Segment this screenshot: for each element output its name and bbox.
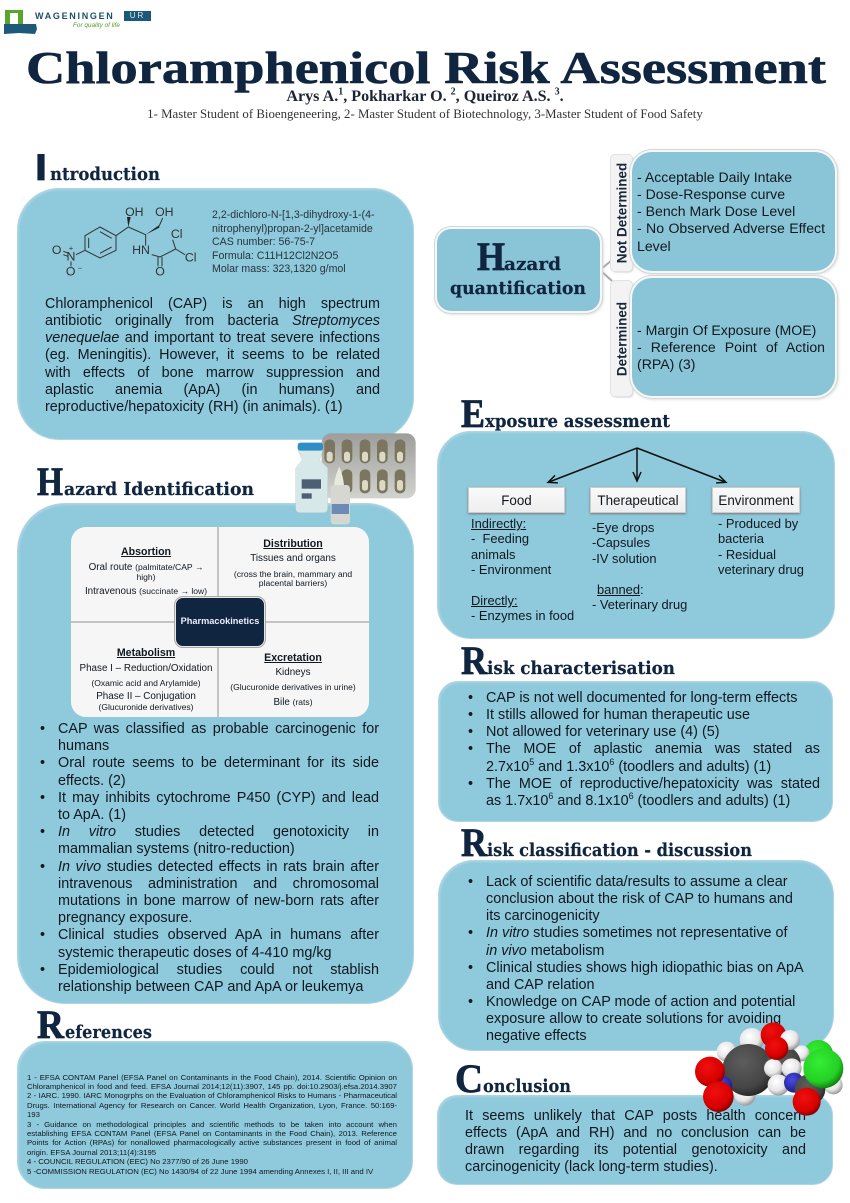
hazard identification bullets: Clinical studies observed ApA in humans after xyxy=(58,927,379,943)
environment text: - Residual xyxy=(718,547,776,562)
therapeutical text: -Capsules xyxy=(592,535,650,550)
heading: risk classification xyxy=(461,820,752,865)
heading: risk classification: R xyxy=(461,820,488,865)
environment text: bacteria xyxy=(718,531,764,546)
discussion bullets: Knowledge on CAP mode of action and potential xyxy=(486,994,795,1010)
discussion bullets: Lack of scientific data/results to assume a clear xyxy=(486,874,788,890)
discussion bullets: negative effects xyxy=(486,1028,587,1044)
reference list: 4 - COUNCIL REGULATION (EEC) No 2377/90 of 26 June 1990 xyxy=(27,1157,248,1166)
food text: animals xyxy=(471,547,515,562)
food text: - Feeding xyxy=(471,531,529,546)
introduction text: antibiotic originally from bacteria Streptomyces xyxy=(45,313,380,329)
heading: risk characterisation xyxy=(461,638,675,683)
logo mark xyxy=(4,10,37,34)
cell: absorption: high) xyxy=(136,572,156,582)
discussion bullets: in vivo metabolism xyxy=(486,943,604,959)
therapeutical text: -Eye drops xyxy=(592,520,654,535)
panel: hazard quantification xyxy=(437,229,600,311)
hazard identification bullets: effects. (2) xyxy=(58,773,126,789)
conclusion text: effects (ApA and RH) and no conclusion can be xyxy=(465,1125,806,1141)
hazard identification bullets xyxy=(40,721,379,995)
reference list: 1 - EFSA CONTAM Panel (EFSA Panel on Contaminants in the Food Chain), 2014. Scientific Opinion on xyxy=(27,1072,397,1082)
cell: absorption xyxy=(85,546,207,597)
box: environment: Environment xyxy=(718,493,794,508)
reference list: 5 -COMMISSION REGULATION (EC) No 1430/94 of 22 June 1994 amending Annexes I, II, III and IV xyxy=(27,1167,373,1176)
reference list: 3 - Guidance on methodological principles and scientific methods to be taken into account when xyxy=(27,1120,397,1129)
heading: introduction: I xyxy=(35,147,47,188)
not determined list: - No Observed Adverse Effect xyxy=(637,220,825,236)
cell: metabolism: (Oxamic acid and Arylamide) xyxy=(91,678,201,688)
compound data: CAS number: 56-75-7 xyxy=(212,236,315,248)
discussion bullets: its carcinogenicity xyxy=(486,908,600,924)
chemical structure: O xyxy=(66,265,75,279)
exposure arrows xyxy=(546,447,728,484)
heading: hazard quantification: quantification xyxy=(450,278,586,299)
hazard identification bullets: systemic therapeutic doses of 4-410 mg/kg xyxy=(58,945,332,961)
introduction text: (eg. Meningitis). However, it seems to be related xyxy=(45,347,380,363)
image: medicine vial, dropper and capsules xyxy=(295,433,416,524)
cell: excretion: Kidneys xyxy=(275,667,311,678)
introduction text xyxy=(45,296,380,415)
heading: exposure assessment: E xyxy=(461,391,485,436)
connector: hazard quantification branches xyxy=(603,260,613,282)
horizontal divider xyxy=(71,621,369,623)
hazard identification bullets: intravenous administration and chromosomal xyxy=(58,876,379,892)
not determined list xyxy=(637,169,825,254)
food text: - Enzymes in food xyxy=(471,608,574,623)
introduction text: venequelae and important to treat severe infections xyxy=(45,330,380,346)
reference list: establishing EFSA CONTAM Panel (EFSA Panel on Contaminants in the Food Chain), 2013. Reference xyxy=(27,1129,397,1138)
hazard identification bullets: It may inhibits cytochrome P450 (CYP) and lead xyxy=(58,790,379,806)
hazard identification bullets: to ApA. (1) xyxy=(58,807,126,823)
hazard identification bullets: mutations in bone marrow of new-born rats after xyxy=(58,893,379,909)
environment text xyxy=(718,516,804,577)
heading: references: R xyxy=(37,1002,65,1047)
chemical structure: O xyxy=(155,265,165,279)
reference list: Chloramphenicol in food and feed. EFSA Journal 2014;12(11):3907, 145 pp. doi:10.2903/j.efsa.2014.3907 xyxy=(27,1082,397,1091)
food text: Directly: xyxy=(471,593,518,608)
image: 3D space-filling molecule xyxy=(695,1022,844,1116)
discussion bullets: conclusion about the risk of CAP to humans and xyxy=(486,891,793,907)
not determined list: - Bench Mark Dose Level xyxy=(637,203,795,219)
cell: metabolism xyxy=(80,647,212,712)
panel: determined xyxy=(632,278,835,396)
cell: metabolism: (Glucuronide derivatives) xyxy=(98,702,194,712)
food text xyxy=(471,516,574,623)
discussion bullets xyxy=(468,874,804,1044)
logo: Wageningen UR xyxy=(4,10,151,34)
not determined list: - Dose-Response curve xyxy=(637,186,785,202)
tab: determined: Determined xyxy=(614,301,629,376)
compound data: Formula: C11H12Cl2N2O5 xyxy=(212,250,338,262)
introduction text: reproductive/hepatoxicity (RH) (in animals). (1) xyxy=(45,399,343,415)
hazard identification bullets: Epidemiological studies could not stablish xyxy=(58,962,379,978)
reference list xyxy=(27,1072,397,1176)
cell: distribution: (cross the brain, mammary and xyxy=(234,569,352,579)
pharmacokinetics centre box: Pharmacokinetics xyxy=(181,616,259,626)
chemical structure: N xyxy=(67,250,75,264)
heading: introduction xyxy=(35,147,160,188)
panel: not determined xyxy=(632,152,835,271)
cell: metabolism: Metabolism xyxy=(117,647,175,659)
panel: hazard identification xyxy=(17,503,414,1004)
determined list xyxy=(637,322,825,372)
heading: conclusion xyxy=(455,1056,571,1101)
hazard identification bullets: relationship between CAP and ApA or leukemya xyxy=(58,979,363,995)
box: environment xyxy=(712,487,800,513)
pharmacokinetics centre box xyxy=(175,597,265,647)
logo UR tag xyxy=(124,11,151,21)
heading: exposure assessment xyxy=(461,391,671,436)
therapeutical text xyxy=(592,520,687,612)
hazard identification bullets: CAP was classified as probable carcinogenic for xyxy=(58,721,379,737)
reference list: 193 xyxy=(27,1110,40,1119)
compound data: nitrophenyl)propan-2-yl]acetamide xyxy=(212,223,373,235)
heading: references xyxy=(37,1002,152,1047)
box: therapeutical: Therapeutical xyxy=(597,493,679,508)
heading: conclusion: C xyxy=(455,1056,483,1101)
cell: excretion: Bile (rats) xyxy=(273,697,313,708)
risk characterisation bullets: 2.7x105 and 1.3x106 (toodlers and adults) (1) xyxy=(486,757,771,775)
environment text: - Produced by xyxy=(718,516,798,531)
heading: hazard identification: azard Identification xyxy=(64,479,254,500)
heading: conclusion: onclusion xyxy=(483,1076,571,1097)
not determined list: Level xyxy=(637,238,671,254)
conclusion text: drawn regarding its potential genotoxicity and xyxy=(465,1142,806,1158)
panel: risk characterisation xyxy=(438,681,833,822)
compound data: Molar mass: 323,1320 g/mol xyxy=(212,263,346,275)
title: Chloramphenicol Risk Assessment xyxy=(26,43,826,93)
heading: hazard quantification xyxy=(450,234,586,299)
heading: hazard identification xyxy=(37,459,254,504)
heading: hazard quantification: H xyxy=(477,234,505,279)
hazard identification bullets: pregnancy exposure. xyxy=(58,910,192,926)
conclusion text: It seems unlikely that CAP posts health concern xyxy=(465,1108,806,1124)
risk characterisation bullets: CAP is not well documented for long-term effects xyxy=(486,690,797,706)
reference list: origin. EFSA Journal 2013;11(4):3195 xyxy=(27,1148,156,1157)
risk characterisation bullets: The MOE of reproductive/hepatoxicity was stated xyxy=(486,776,820,792)
determined list: - Margin Of Exposure (MOE) xyxy=(637,322,816,338)
cell: distribution xyxy=(234,538,352,588)
panel: exposure assessment xyxy=(437,431,835,639)
panel: conclusion xyxy=(437,1095,833,1185)
tab: not determined: Not Determined xyxy=(614,163,629,263)
discussion bullets: and CAP relation xyxy=(486,977,595,993)
chemical structure: OH xyxy=(155,205,174,219)
therapeutical text: - Veterinary drug xyxy=(592,597,687,612)
panel: risk classification discussion xyxy=(438,860,834,1051)
heading: introduction: ntroduction xyxy=(50,164,160,185)
therapeutical text: -IV solution xyxy=(592,551,656,566)
conclusion text xyxy=(465,1108,806,1175)
reference list: Drugs. International Agency for Research on Cancer. World Health Organization, Lyon, France. 50:169- xyxy=(27,1101,397,1110)
heading: risk characterisation: isk characterisation xyxy=(487,658,675,679)
risk characterisation bullets: The MOE of aplastic anemia was stated as xyxy=(486,741,820,757)
conclusion text: carcinogenicity (lack long-term studies). xyxy=(465,1159,718,1175)
vertical divider xyxy=(217,527,219,717)
cell: excretion xyxy=(230,652,356,708)
not determined list: - Acceptable Daily Intake xyxy=(637,169,792,185)
heading: risk characterisation: R xyxy=(461,638,488,683)
heading: exposure assessment: xposure assessment xyxy=(485,411,671,432)
chemical structure: O xyxy=(52,243,61,257)
heading: risk classification: isk classification - discussion xyxy=(487,840,752,861)
logo wordmark: WAGENINGEN xyxy=(35,11,115,21)
cell: absorption: Intravenous (succinate → low) xyxy=(85,586,207,597)
introduction text: aplastic anemia (ApA) (in humans) and xyxy=(45,382,380,398)
food text: - Environment xyxy=(471,562,551,577)
panel: introduction xyxy=(17,188,414,440)
environment text: veterinary drug xyxy=(718,562,804,577)
compound data: 2,2-dichloro-N-[1,3-dihydroxy-1-(4- xyxy=(212,209,374,221)
cell: excretion: Excretation xyxy=(264,652,322,664)
cell: distribution: Tissues and organs xyxy=(250,553,336,564)
chemical structure: HN xyxy=(132,243,150,257)
risk characterisation bullets: as 1.7x106 and 8.1x106 (toodlers and adults) (1) xyxy=(486,791,790,809)
cell: distribution: placental barriers) xyxy=(259,578,327,588)
cell: metabolism: Phase II – Conjugation xyxy=(96,691,196,702)
chemical structure xyxy=(52,205,196,279)
panel: references xyxy=(17,1041,413,1189)
hazard identification bullets: Oral route seems to be determinant for its side xyxy=(58,755,379,771)
introduction text: Chloramphenicol (CAP) is an high spectrum xyxy=(45,296,380,312)
author names: Arys A.1, Pokharkar O. 2, Queiroz A.S. 3. xyxy=(286,87,564,105)
chemical structure: Cl xyxy=(185,250,196,264)
box: therapeutical xyxy=(590,487,686,513)
reference list: Points for Action (RPAs) for nonallowed pharmacologically active substances present in food of animal xyxy=(27,1138,397,1147)
cell: absorption: Oral route (palmitate/CAP → xyxy=(89,562,203,573)
discussion bullets: exposure allow to create solutions for avoiding xyxy=(486,1011,781,1027)
determined list: (RPA) (3) xyxy=(637,356,695,372)
risk characterisation bullets: It stills allowed for human therapeutic use xyxy=(486,707,750,723)
cell: excretion: (Glucuronide derivatives in urine) xyxy=(230,682,356,692)
hazard identification bullets: In vitro studies detected genotoxicity in xyxy=(58,824,379,840)
cell: absorption: Absortion xyxy=(121,546,171,558)
hazard identification bullets: In vivo studies detected effects in rats brain after xyxy=(58,859,379,875)
determined list: - Reference Point of Action xyxy=(637,339,825,355)
box: food xyxy=(468,487,565,513)
logo tagline: For quality of life xyxy=(73,22,120,29)
chemical structure: + xyxy=(69,244,73,253)
food text: Indirectly: xyxy=(471,516,526,531)
cell: distribution: Distribution xyxy=(263,538,323,550)
tab: not determined xyxy=(611,155,632,271)
risk characterisation bullets xyxy=(468,690,820,809)
reference list: 2 - IARC. 1990. IARC Monogrphs on the Evaluation of Chloramphenicol Risks to Humans - Pharmaceutical xyxy=(27,1091,397,1100)
affiliations: 1- Master Student of Bioengeneering, 2- Master Student of Biotechnology, 3-Master Student of Food Safety xyxy=(147,107,703,121)
compound data xyxy=(212,209,374,275)
chemical structure: Cl xyxy=(171,227,182,241)
logo UR tag: UR xyxy=(130,11,145,20)
heading: references: eferences xyxy=(65,1022,152,1043)
heading: hazard identification: H xyxy=(37,459,63,504)
hazard identification bullets: humans xyxy=(58,738,109,754)
hazard identification bullets: mammalian systems (nitro-reduction) xyxy=(58,841,295,857)
tab: determined xyxy=(611,281,632,396)
pharmacokinetics diagram xyxy=(71,527,369,717)
heading: hazard quantification: azard xyxy=(504,254,561,275)
chemical structure: OH xyxy=(125,205,144,219)
introduction text: with effects of bone marrow suppression and xyxy=(45,365,380,381)
box: food: Food xyxy=(501,493,532,508)
risk characterisation bullets: Not allowed for veterinary use (4) (5) xyxy=(486,724,720,740)
cell: metabolism: Phase I – Reduction/Oxidation xyxy=(80,663,212,674)
chemical structure: − xyxy=(78,263,82,272)
discussion bullets: In vitro studies sometimes not representative of xyxy=(486,925,788,941)
therapeutical text: banned: xyxy=(597,582,644,597)
discussion bullets: Clinical studies shows high idiopathic bias on ApA xyxy=(486,960,804,976)
